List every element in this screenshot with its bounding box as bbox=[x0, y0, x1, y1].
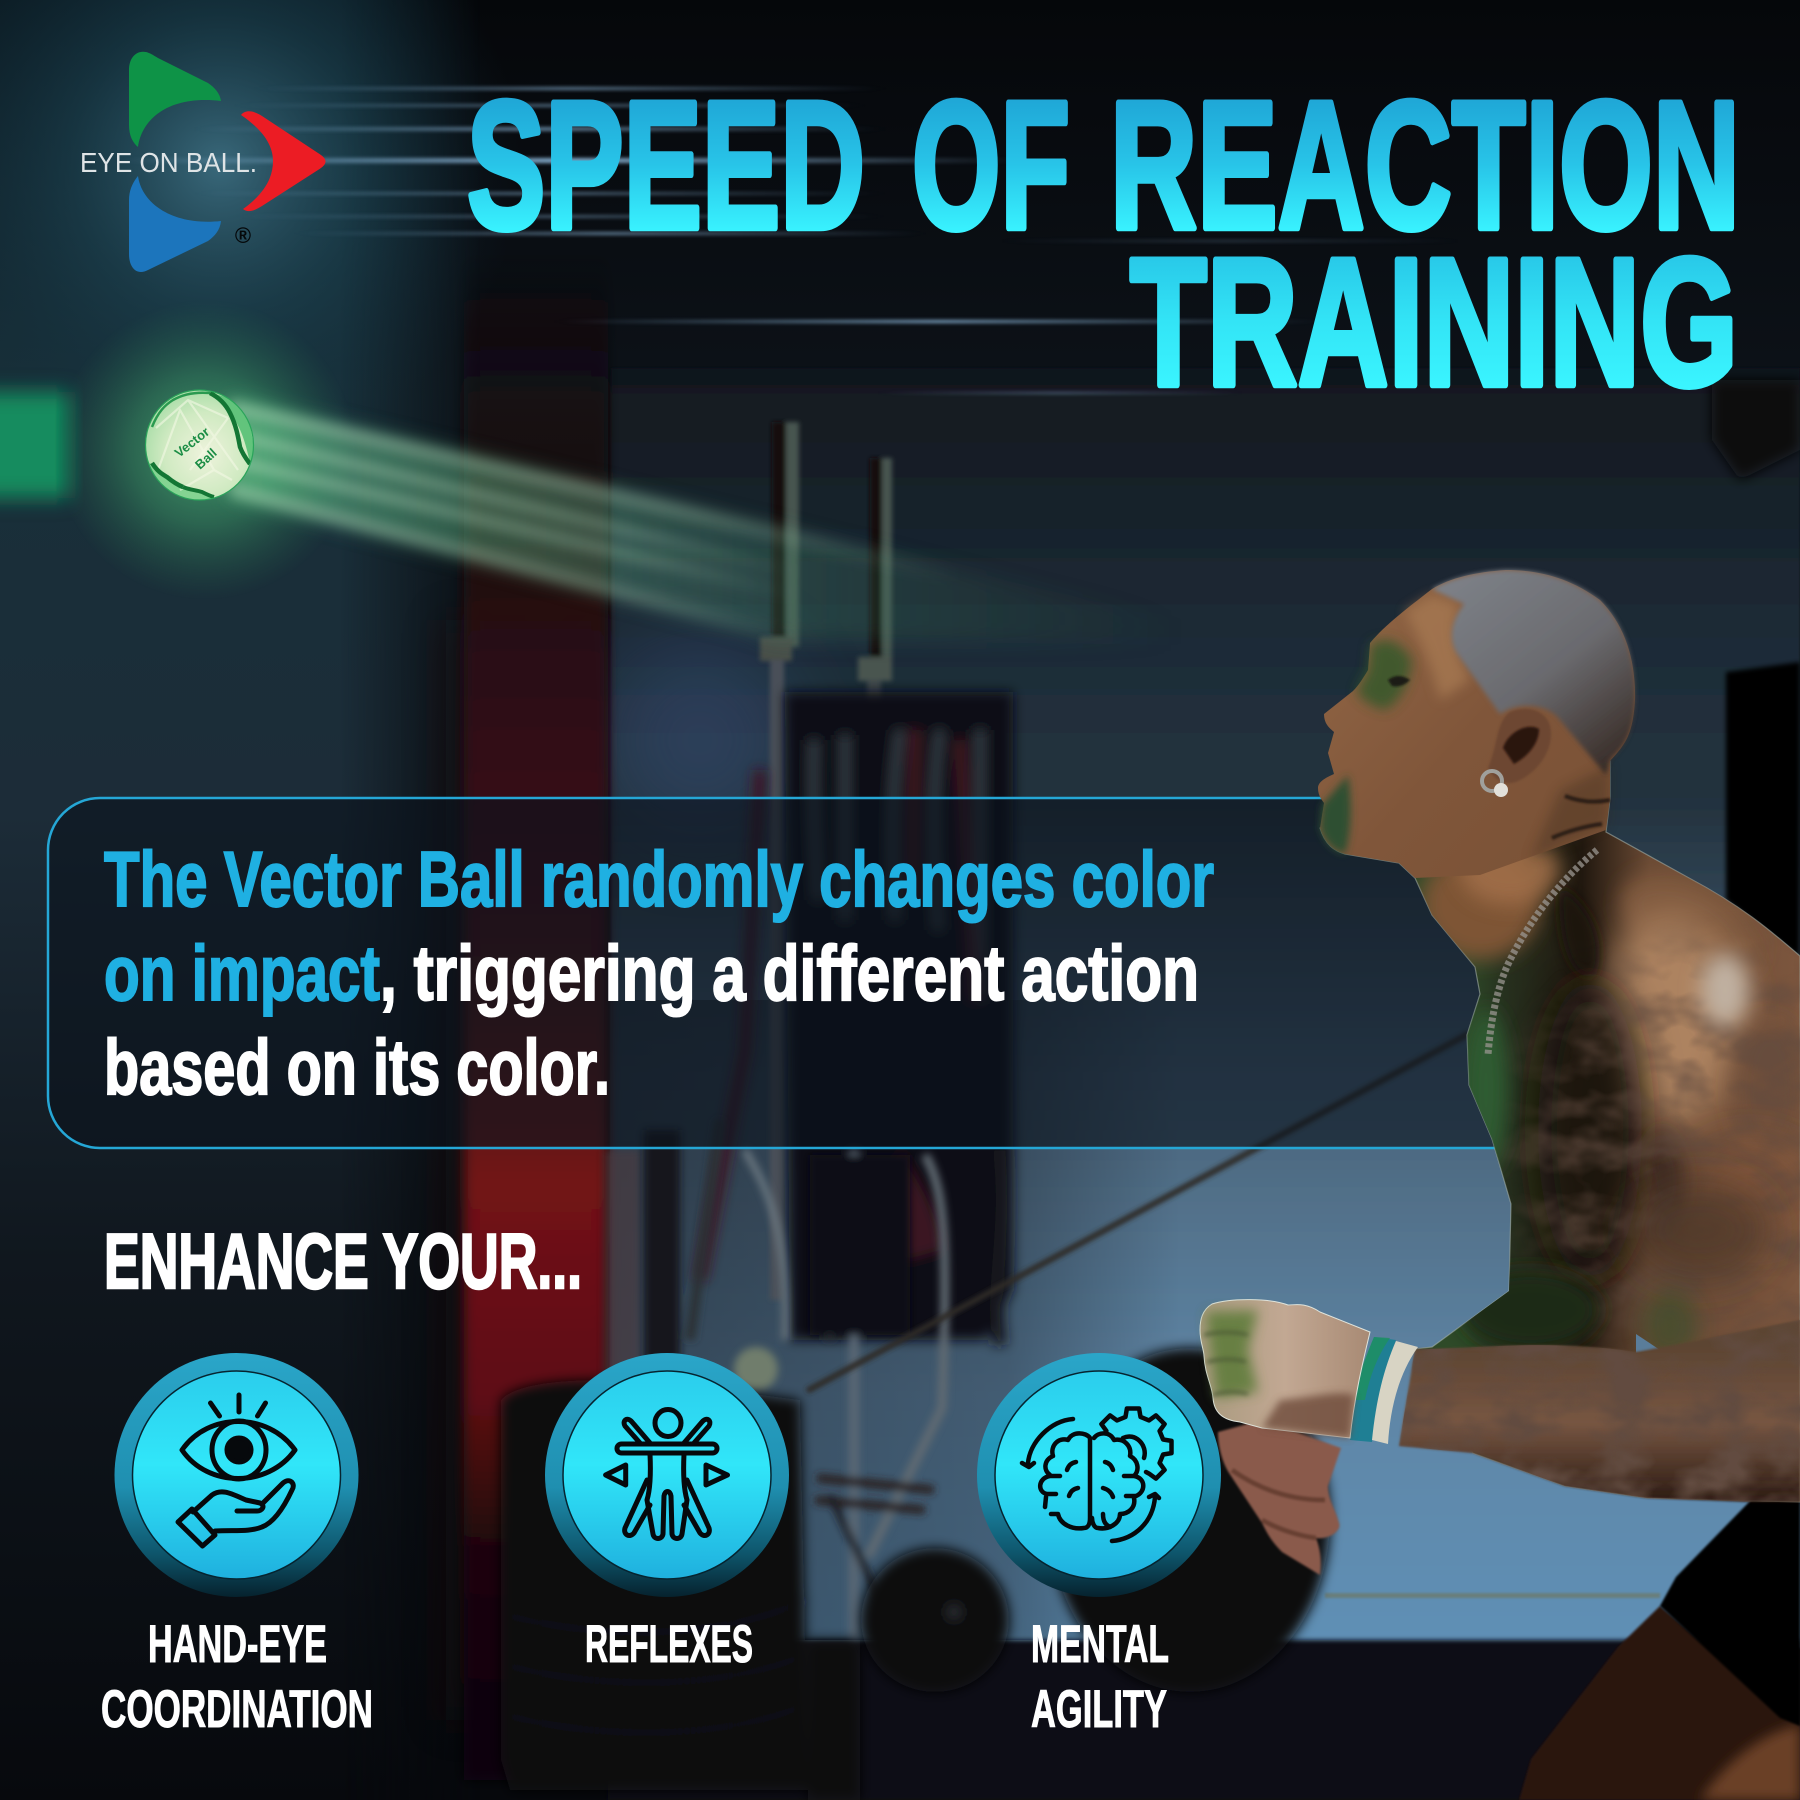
man: fist bbox=[1200, 1300, 1370, 1438]
logo wordmark: EYE ON BALL. bbox=[80, 147, 257, 178]
panel: vector ball description bbox=[48, 798, 1500, 1148]
green light beam from ball bbox=[230, 398, 1180, 646]
glowing Vector Ball bbox=[144, 390, 258, 504]
icon: brain with gear bbox=[1022, 1408, 1172, 1541]
logo: Eye On Ball bbox=[80, 52, 326, 272]
description text: based on its color. bbox=[104, 1023, 610, 1111]
man: wall gap under arm bbox=[1636, 1334, 1660, 1353]
description text: , triggering a different action bbox=[380, 929, 1199, 1017]
background: floor bbox=[608, 1640, 1800, 1800]
man: shorts and thigh bbox=[1519, 1500, 1800, 1800]
title: OF bbox=[912, 63, 1070, 267]
title bbox=[467, 63, 1740, 424]
green halo around ball bbox=[55, 300, 355, 600]
man: forearm tattoos bbox=[1399, 1320, 1800, 1502]
man: knuckle light bbox=[1206, 1310, 1258, 1398]
man: neck shadow bbox=[1530, 765, 1610, 860]
icon badge: reflexes bbox=[545, 1353, 789, 1597]
description text: on impact bbox=[104, 929, 380, 1017]
man: torso and neck bbox=[1320, 720, 1800, 1502]
man: eye bbox=[1388, 676, 1410, 686]
man: forearm bbox=[1399, 1320, 1800, 1502]
label: hand-eye coordination bbox=[101, 1615, 373, 1739]
man: neck crease bbox=[1552, 796, 1610, 838]
description text: The Vector Ball randomly changes color bbox=[104, 835, 1214, 923]
background: band rack bbox=[700, 692, 1013, 1345]
man: hand shadow bbox=[1262, 1393, 1354, 1438]
ball label: Vector bbox=[172, 424, 212, 460]
icon badge: hand-eye coordination bbox=[114, 1353, 358, 1597]
label: mental agility bbox=[1031, 1615, 1169, 1739]
icon: vitruvian figure bbox=[606, 1410, 728, 1538]
man: lower hand bbox=[1218, 1420, 1341, 1575]
background: silver bars and tube bbox=[644, 1120, 945, 1640]
man: ear bbox=[1488, 709, 1551, 783]
registered mark: ® bbox=[235, 223, 251, 248]
label: reflexes: REFLEXES bbox=[585, 1615, 753, 1674]
man: torso shading bbox=[1416, 846, 1800, 1348]
man: finger creases bbox=[1204, 1332, 1248, 1395]
background: wall bbox=[611, 368, 1800, 1648]
label: mental agility: MENTAL bbox=[1031, 1615, 1169, 1674]
description text bbox=[104, 835, 1214, 1111]
man: wristbands bbox=[1350, 1337, 1418, 1444]
man: head bbox=[1318, 570, 1635, 878]
title: SPEED bbox=[467, 63, 865, 267]
icon badge: mental agility bbox=[977, 1353, 1221, 1597]
logo blue triangle bbox=[129, 176, 221, 272]
background: wall base line bbox=[1325, 1593, 1660, 1598]
ball label bbox=[172, 424, 220, 472]
light streaks behind title bbox=[120, 87, 1460, 394]
label: hand-eye coordination: COORDINATION bbox=[101, 1680, 373, 1739]
icon: eye and hand bbox=[178, 1395, 295, 1546]
heading: enhance your: ENHANCE YOUR... bbox=[104, 1217, 582, 1305]
label: mental agility: AGILITY bbox=[1031, 1680, 1167, 1739]
man: athlete in profile bbox=[1200, 570, 1800, 1800]
logo red triangle bbox=[241, 111, 326, 211]
man: necklace bbox=[1488, 850, 1597, 1055]
green reflection at left edge bbox=[0, 392, 84, 498]
ball label: Ball bbox=[192, 445, 220, 472]
logo green triangle bbox=[129, 52, 221, 147]
background: hanging bag bbox=[1726, 662, 1800, 958]
man: green face light bbox=[1356, 640, 1412, 710]
man: earring bbox=[1482, 771, 1508, 797]
background: red pillar bbox=[445, 250, 608, 1780]
label: hand-eye coordination: HAND-EYE bbox=[148, 1615, 327, 1674]
man: hair bbox=[1432, 570, 1635, 775]
background: stair rail bbox=[807, 1033, 1470, 1391]
background: medicine balls bbox=[861, 1348, 1330, 1692]
background: barbells bbox=[760, 422, 892, 1300]
background: weight plates bbox=[501, 1380, 860, 1800]
man: forehead highlight bbox=[1405, 595, 1470, 700]
